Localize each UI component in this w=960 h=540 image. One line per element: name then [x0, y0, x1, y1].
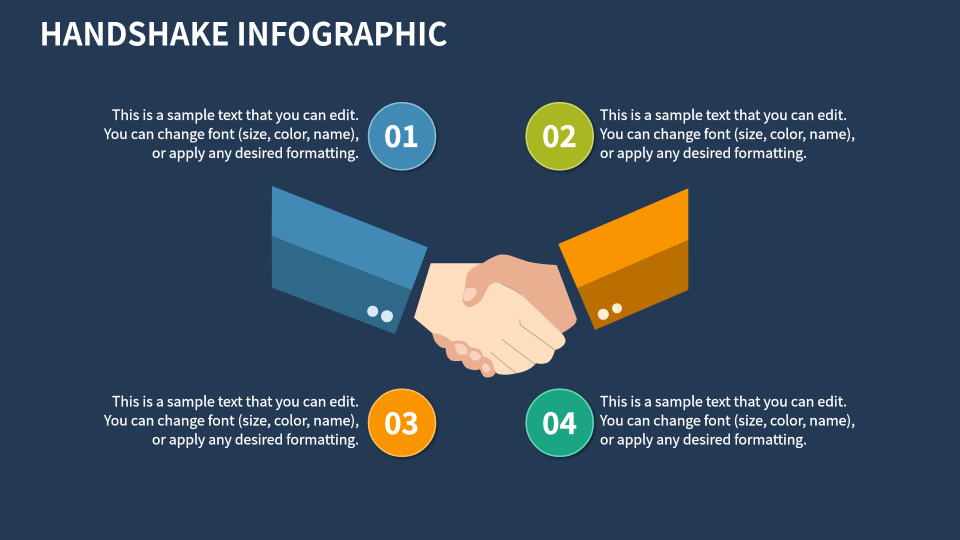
text block: item 04: or apply any desired formatting.: [600, 430, 807, 450]
icon: orange right cuff: [558, 188, 688, 330]
badge: 03: 03: [384, 401, 419, 443]
text block: item 04: You can change font (size, color, name),: [599, 410, 855, 430]
badge: 01: [368, 103, 436, 170]
text block: item 01: or apply any desired formatting.: [152, 143, 359, 163]
badge: 03: [368, 389, 436, 456]
title: HANDSHAKE INFOGRAPHIC: [40, 10, 448, 56]
badge: 01: 01: [384, 114, 419, 156]
text block: item 03: or apply any desired formatting.: [152, 430, 359, 450]
badge: 04: [526, 389, 593, 456]
text block: item 03: [103, 392, 359, 450]
text block: item 02: [599, 105, 855, 163]
text block: item 02: This is a sample text that you can edit.: [600, 105, 847, 125]
badge: 02: 02: [542, 114, 577, 156]
text block: item 02: or apply any desired formatting.: [600, 143, 807, 163]
text block: item 02: You can change font (size, color, name),: [599, 124, 855, 144]
text block: item 01: [103, 105, 359, 163]
icon: blue left cuff: [272, 186, 428, 334]
icon: handshake: [414, 254, 577, 377]
text block: item 04: [599, 392, 855, 450]
text block: item 03: You can change font (size, color, name),: [103, 410, 359, 430]
badge: 04: 04: [542, 401, 577, 443]
text block: item 01: You can change font (size, color, name),: [103, 124, 359, 144]
badge: 02: [526, 103, 593, 170]
text block: item 04: This is a sample text that you can edit.: [600, 392, 847, 412]
text block: item 03: This is a sample text that you can edit.: [112, 392, 359, 412]
text block: item 01: This is a sample text that you can edit.: [112, 105, 359, 125]
